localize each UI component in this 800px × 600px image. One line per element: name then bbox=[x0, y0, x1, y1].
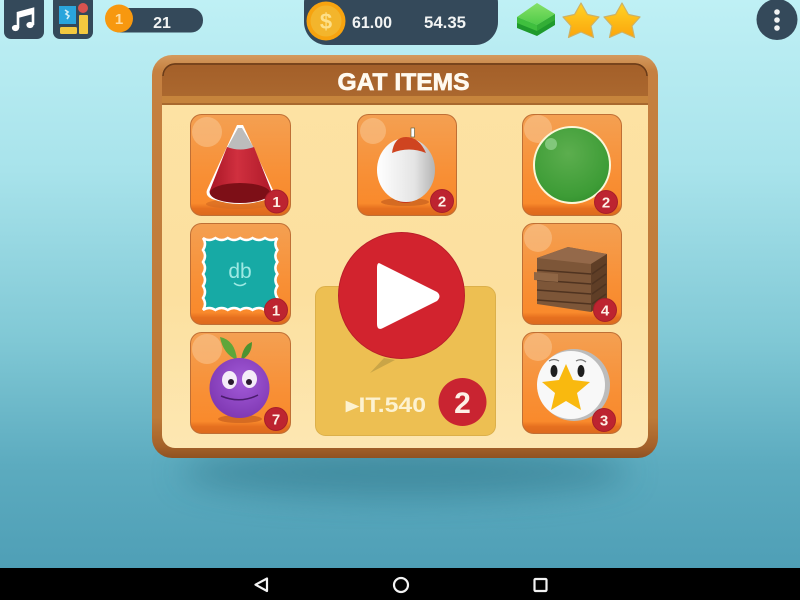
quantity badge: 1 bbox=[272, 194, 281, 211]
icon: star bbox=[604, 3, 640, 38]
tile: fishing float bbox=[358, 114, 456, 216]
coin counter bbox=[105, 4, 203, 32]
tile: teal card: db bbox=[228, 260, 252, 283]
play button bbox=[338, 232, 464, 358]
icon: menu button bbox=[756, 0, 798, 40]
quantity badge: 2 bbox=[602, 194, 610, 212]
heading: GAT ITEMS bbox=[338, 69, 470, 96]
tile: purple plum bbox=[190, 332, 290, 434]
reward price: ▸IT.540 bbox=[345, 394, 426, 417]
icon: home bbox=[394, 578, 408, 592]
reward card bbox=[316, 232, 496, 436]
tile: teal card bbox=[190, 224, 290, 324]
quantity badge: 2 bbox=[438, 194, 446, 210]
quantity badge: 1 bbox=[272, 302, 280, 320]
icon: recent bbox=[534, 579, 546, 591]
coin counter: 1 bbox=[115, 11, 123, 28]
tile: green ball bbox=[522, 114, 622, 216]
quantity badge: 7 bbox=[272, 412, 280, 428]
currency counter: 61.00 bbox=[352, 14, 392, 32]
icon: puzzle app button bbox=[53, 0, 93, 39]
quantity badge: 4 bbox=[601, 302, 610, 320]
tile: red cone bbox=[190, 114, 290, 216]
title bar bbox=[162, 63, 648, 105]
tile: star coin bbox=[522, 332, 622, 434]
currency counter: 54.35 bbox=[424, 14, 466, 32]
panel: items bbox=[152, 55, 658, 458]
currency counter: $ bbox=[320, 9, 332, 34]
quantity badge: 2 bbox=[454, 387, 471, 420]
tile: wooden crate bbox=[522, 224, 622, 324]
quantity badge: 3 bbox=[600, 412, 608, 430]
icon: back bbox=[256, 578, 267, 591]
currency counter bbox=[304, 0, 498, 45]
navigation bar bbox=[0, 568, 800, 600]
icon: star bbox=[563, 3, 599, 38]
top bar bbox=[4, 0, 798, 45]
icon: green cube bbox=[517, 3, 555, 36]
quantity badge bbox=[438, 378, 486, 426]
coin counter: 21 bbox=[153, 15, 171, 32]
icon: music button bbox=[4, 0, 44, 39]
